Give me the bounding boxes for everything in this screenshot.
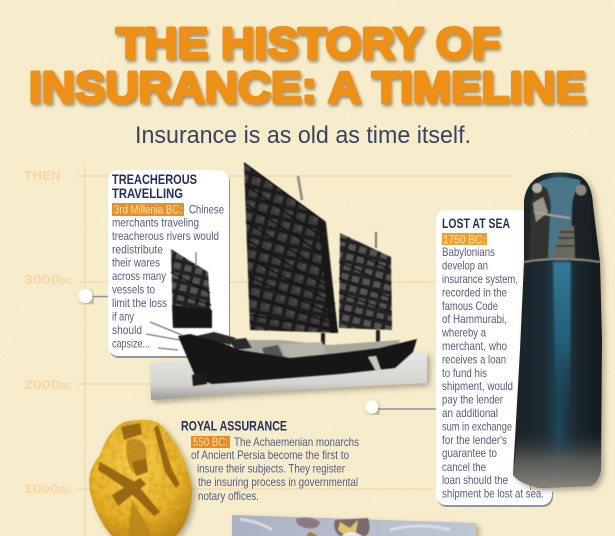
timeline labels: BC [60,277,73,286]
body text: The Achaemenian monarchs [234,435,359,449]
body text: whereby a [441,326,486,340]
body text [112,202,224,350]
body text: for the lender's [442,433,507,447]
subtitle: Insurance is as old as time itself. [135,122,471,149]
white halo of sails [176,272,225,335]
body text: to fund his [442,366,487,380]
timeline labels [24,169,73,496]
heading: LOST AT SEA [442,215,510,231]
heading: TREACHEROUS [112,171,197,187]
body text: treacherous rivers would [112,229,219,243]
timeline labels: 1000 [24,482,59,496]
body text: develop an [442,258,488,272]
title [29,19,586,112]
timeline labels: 3000 [24,272,60,287]
timeline labels: 2000 [24,377,60,392]
body text: loan should the [442,473,508,487]
body text: insure their subjects. They register [197,462,345,476]
body text: pay the lender [442,392,503,406]
body text: sum in exchange [442,420,512,434]
heading [112,171,197,201]
relief [524,177,600,262]
hull [178,332,417,386]
body text [191,435,359,503]
main sail [244,163,338,333]
body text: notary offices. [198,489,259,503]
body text: shipment be lost at sea. [442,486,544,500]
coin texture [89,420,192,536]
body text: shipment, would [442,379,513,393]
photo water [150,352,427,400]
heading: ROYAL ASSURANCE [181,418,287,434]
right sail [339,232,392,330]
body text: merchants traveling [112,216,199,230]
body text: across many [112,269,166,283]
body text: limit the loss [112,296,167,310]
panel: lost at sea [436,210,552,505]
date tag: 3rd Millenia BC: [114,204,182,216]
body text: Babylonians [442,245,495,259]
body text: merchant, who [442,339,507,353]
body text: capsize... [112,336,150,350]
body text: an additional [442,406,498,420]
body text: cancel the [442,460,486,474]
timeline axis [77,164,512,536]
body text: the insuring process in governmental [198,475,358,489]
image: stele of Hammurabi [513,172,602,488]
connector: 3000 BC [78,289,108,303]
timeline labels: BC [59,486,72,495]
body text: receives a loan [442,352,506,366]
body text: vessels to [112,282,155,296]
image: junk ship [146,163,427,400]
date tag: 550 BC: [193,437,228,449]
body text: famous Code [442,299,498,313]
body text: recorded in the [442,286,507,300]
body text: their wares [112,256,160,270]
date tag: 1750 BC: [443,234,485,246]
body text: redistribute [112,242,163,256]
body text: if any [112,310,134,324]
left sail [171,249,212,328]
worn base [513,430,601,488]
body text: of Hammurabi, [442,312,507,326]
body text: Chinese [189,202,224,216]
panel: treacherous travelling [108,170,229,356]
body text: of Ancient Persia become the first to [191,448,349,462]
heading: TRAVELLING [112,185,183,201]
figure [98,423,180,536]
connector: 1750 BC [366,400,436,414]
body text [441,245,544,500]
timeline labels: THEN [24,169,61,183]
body text: should [112,323,142,337]
image: painting [232,515,476,536]
image: gold coin [89,420,192,536]
blue light band [553,262,571,420]
timeline labels: BC [60,382,73,391]
masts and cargo [146,322,400,362]
body text: insurance system, [442,272,518,286]
title: INSURANCE: A TIMELINE [29,63,586,112]
panel: royal assurance [181,418,359,503]
title: THE HISTORY OF [116,19,500,68]
body text: guarantee to [442,446,497,460]
